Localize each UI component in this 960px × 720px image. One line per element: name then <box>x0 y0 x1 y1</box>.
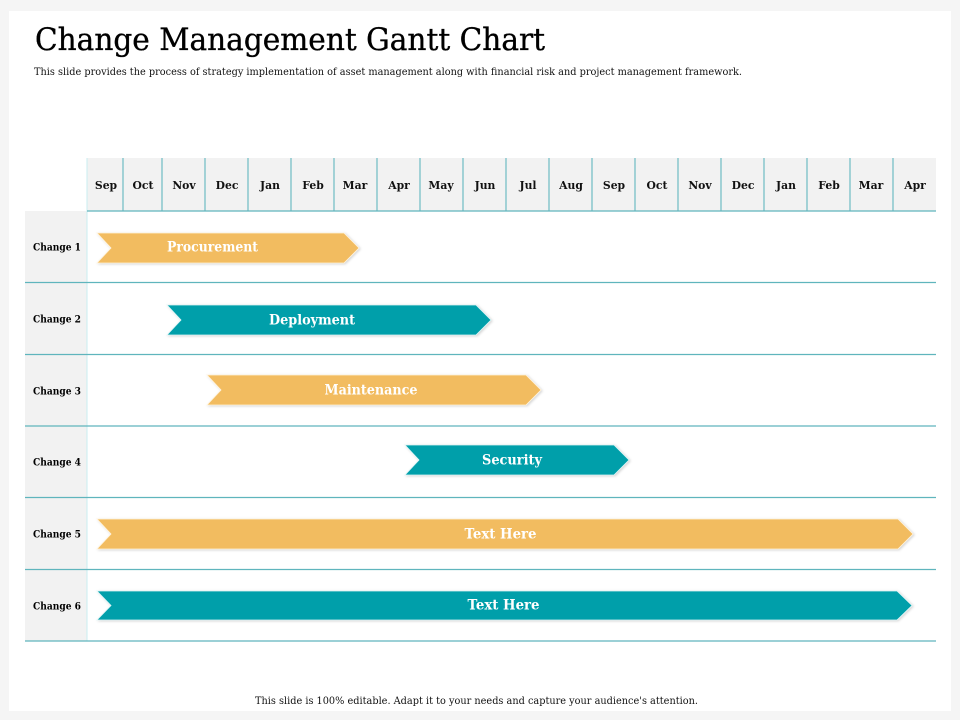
row labels: Change 4 <box>33 458 81 468</box>
row labels <box>25 211 87 641</box>
bar: Deployment <box>167 305 491 335</box>
month header: Mar <box>859 179 884 192</box>
footer note: This slide is 100% editable. Adapt it to your needs and capture your audience's attention. <box>255 696 698 707</box>
month header: Aug <box>558 179 583 192</box>
bar: Procurement <box>97 233 359 263</box>
month header: Jul <box>518 179 537 192</box>
bar: Text Here 6: Text Here <box>468 598 540 614</box>
month header: Apr <box>903 179 926 192</box>
bar: Text Here 5 <box>97 519 913 549</box>
bar: Maintenance: Maintenance <box>324 382 418 398</box>
subtitle: This slide provides the process of strategy implementation of asset management along with financial risk and project management framework. <box>34 67 742 78</box>
month header: Mar <box>343 179 368 192</box>
row labels: Change 3 <box>33 386 81 398</box>
month header: Jan <box>775 179 796 192</box>
month header: Feb <box>818 179 840 192</box>
month header <box>87 158 936 211</box>
month header: Apr <box>387 179 410 192</box>
month header: Oct <box>647 179 667 192</box>
month header: Dec <box>216 179 239 192</box>
bar: Security: Security <box>482 452 543 468</box>
month header: Oct <box>133 179 153 192</box>
month header: Nov <box>172 179 196 192</box>
month header: Sep <box>603 179 626 192</box>
title: Change Management Gantt Chart <box>35 22 546 58</box>
month header: Jan <box>259 179 280 192</box>
row labels: Change 5 <box>33 530 81 540</box>
bar: Procurement: Procurement <box>167 240 258 256</box>
month header: Feb <box>302 179 324 192</box>
month header: May <box>428 179 454 192</box>
month header: Nov <box>688 179 712 192</box>
bar: Text Here 5: Text Here <box>464 526 537 542</box>
bar: Maintenance <box>207 375 541 405</box>
month header: Sep <box>95 179 118 192</box>
bar: Deployment: Deployment <box>269 312 355 328</box>
bar: Text Here 6 <box>97 591 912 620</box>
month header: Dec <box>732 179 755 192</box>
bar: Security <box>405 445 629 475</box>
month header: Jun <box>474 179 496 192</box>
gantt chart <box>25 158 936 641</box>
row labels: Change 2 <box>33 314 81 326</box>
row labels: Change 6 <box>33 602 81 612</box>
row labels: Change 1 <box>33 242 81 254</box>
